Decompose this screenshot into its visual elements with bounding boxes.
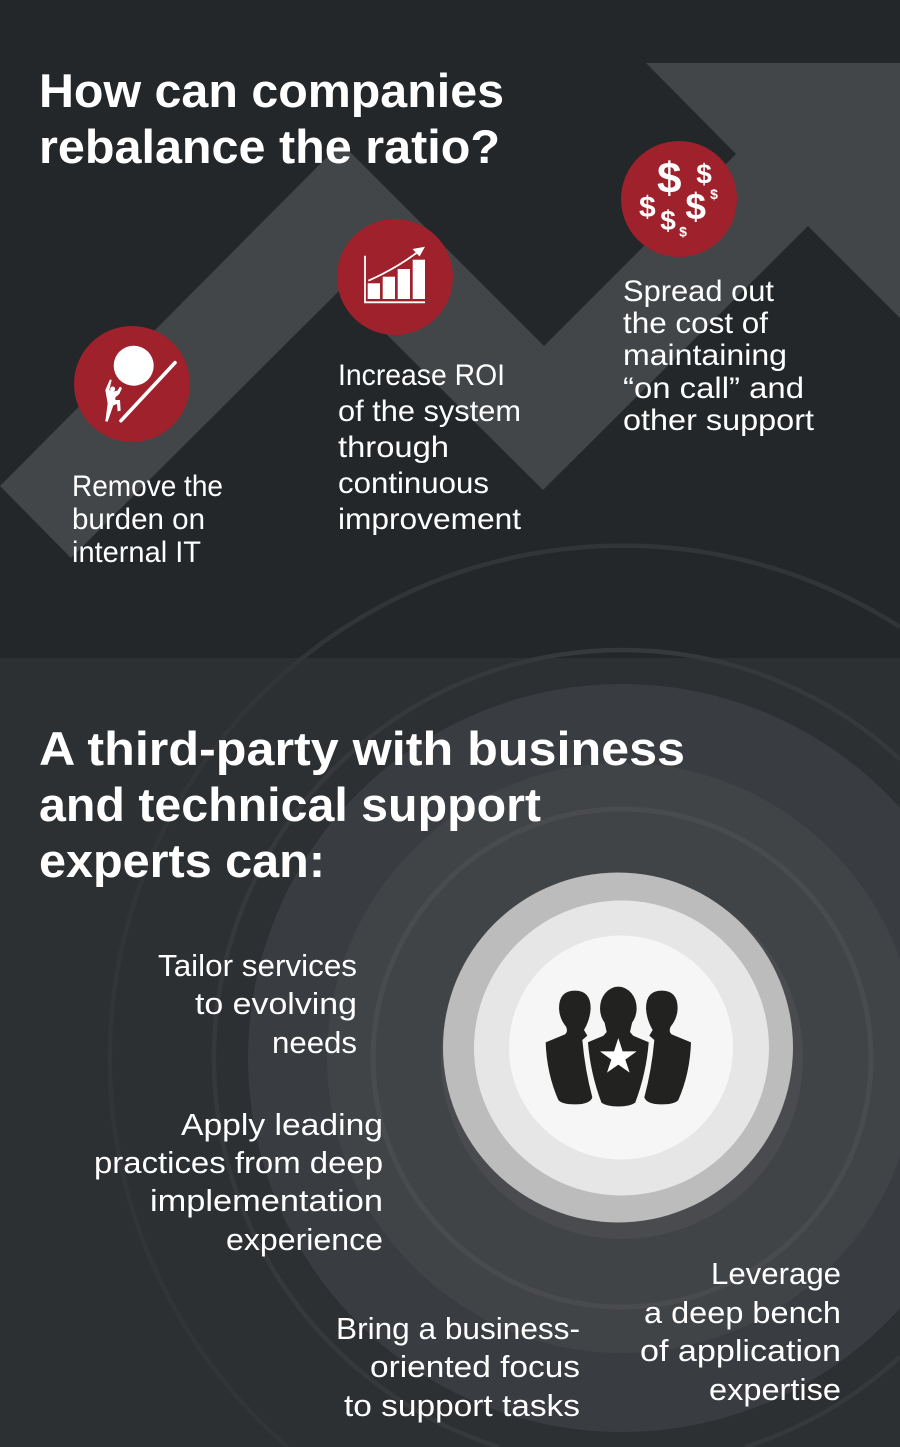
- text: deep bench: of application: [640, 1333, 841, 1368]
- step 1: remove the burden: [72, 326, 223, 569]
- text: tailor services: Tailor services: [158, 948, 357, 983]
- text: deep bench: [640, 1256, 841, 1407]
- text: apply leading practices: Apply leading: [181, 1107, 383, 1142]
- text: deep bench: expertise: [709, 1372, 841, 1407]
- title: top section: [39, 64, 504, 173]
- icon: dollar signs: $: [685, 186, 706, 227]
- text: increase ROI: [338, 359, 521, 536]
- text: increase ROI: continuous: [338, 467, 489, 500]
- text: spread out the cost: “on call” and: [623, 372, 804, 405]
- text: increase ROI: of the system: [338, 395, 521, 428]
- step 2: increase ROI: [337, 219, 521, 536]
- icon: dollar signs: $: [639, 191, 656, 224]
- text: business-oriented focus: to support tasks: [344, 1388, 580, 1423]
- text: apply leading practices: experience: [226, 1222, 383, 1257]
- icon: dollar signs: $: [679, 224, 687, 240]
- text: apply leading practices: implementation: [150, 1183, 383, 1218]
- text: increase ROI: through: [338, 431, 449, 464]
- title: top section: rebalance the ratio?: [39, 120, 500, 173]
- title: bottom section: experts can:: [39, 834, 325, 887]
- text: apply leading practices: [94, 1107, 383, 1257]
- icon: rising bar chart: [337, 219, 453, 335]
- text: spread out the cost: maintaining: [623, 339, 787, 372]
- text: deep bench: Leverage: [711, 1256, 841, 1291]
- text: remove the burden: [72, 470, 223, 569]
- icon: three people with star: [546, 987, 691, 1108]
- text: tailor services: to evolving: [195, 986, 357, 1021]
- title: bottom section: and technical support: [39, 778, 541, 831]
- title: top section: How can companies: [39, 64, 504, 117]
- text: remove the burden: burden on: [72, 503, 205, 536]
- icon: figure pushing boulder: [74, 326, 190, 442]
- text: remove the burden: Remove the: [72, 470, 223, 503]
- icon: dollar signs: [621, 141, 737, 257]
- text: business-oriented focus: [336, 1311, 580, 1423]
- icon: dollar signs: $: [657, 154, 682, 203]
- text: apply leading practices: practices from deep: [94, 1145, 383, 1180]
- text: deep bench: a deep bench: [644, 1295, 841, 1330]
- icon: dollar signs: $: [660, 205, 676, 236]
- text: spread out the cost: the cost of: [623, 307, 769, 340]
- text: increase ROI: improvement: [338, 503, 521, 536]
- text: spread out the cost: other support: [623, 404, 814, 437]
- step 3: spread out the cost: [621, 141, 814, 437]
- text: business-oriented focus: oriented focus: [370, 1349, 580, 1384]
- text: business-oriented focus: Bring a business-: [336, 1311, 580, 1346]
- title: bottom section: [39, 722, 685, 887]
- text: increase ROI: Increase ROI: [338, 359, 505, 392]
- title: bottom section: A third-party with business: [39, 722, 685, 775]
- icon: dollar signs: $: [710, 186, 718, 202]
- text: tailor services: needs: [272, 1025, 357, 1060]
- text: remove the burden: internal IT: [72, 536, 201, 569]
- text: tailor services: [158, 948, 357, 1060]
- arrow: rising zig-zag: [0, 63, 900, 558]
- central concentric discs with team icon: [443, 872, 793, 1222]
- text: spread out the cost: Spread out: [623, 275, 774, 308]
- icon: dollar signs: $: [696, 158, 712, 190]
- text: spread out the cost: [623, 275, 814, 437]
